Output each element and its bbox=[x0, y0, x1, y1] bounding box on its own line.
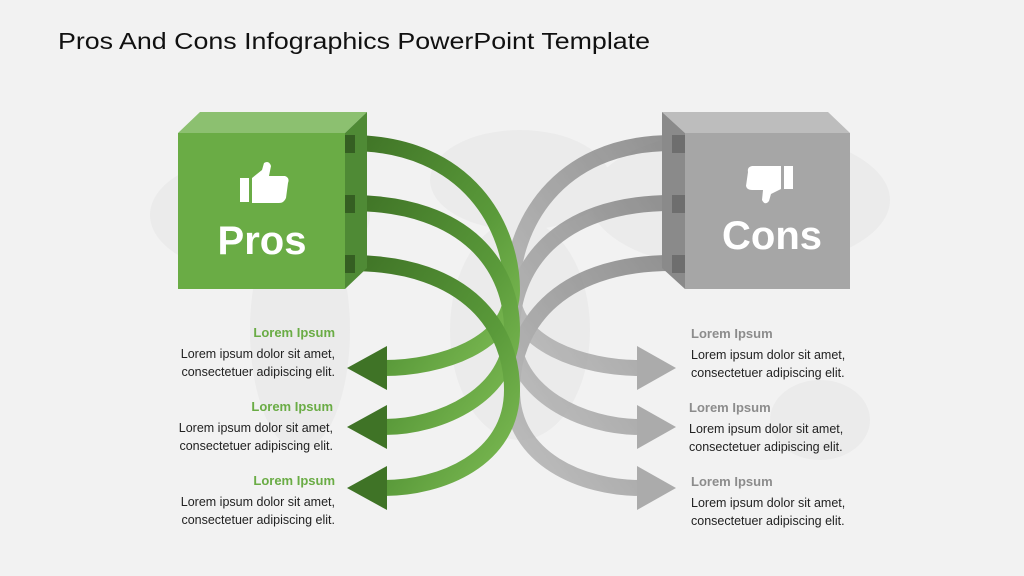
pros texts: consectetuer adipiscing elit. bbox=[179, 439, 333, 453]
title: Pros And Cons Infographics PowerPoint Template bbox=[58, 28, 650, 54]
cons texts: consectetuer adipiscing elit. bbox=[689, 440, 843, 454]
cons texts: Lorem Ipsum bbox=[689, 400, 771, 415]
pros texts: Lorem ipsum dolor sit amet, bbox=[179, 421, 333, 435]
pros texts: Lorem Ipsum bbox=[253, 473, 335, 488]
pros label: Pros bbox=[218, 219, 306, 263]
icon: thumbs down bbox=[746, 166, 793, 203]
icon: thumbs up bbox=[240, 162, 289, 203]
pros texts: Lorem Ipsum bbox=[251, 399, 333, 414]
cons label: Cons bbox=[722, 214, 822, 258]
cons texts: Lorem ipsum dolor sit amet, bbox=[689, 422, 843, 436]
pros texts: Lorem Ipsum bbox=[253, 325, 335, 340]
pros texts: Lorem ipsum dolor sit amet, bbox=[181, 347, 335, 361]
cons texts: Lorem Ipsum bbox=[691, 326, 773, 341]
cons texts bbox=[689, 326, 845, 528]
cons texts: Lorem Ipsum bbox=[691, 474, 773, 489]
cons texts: Lorem ipsum dolor sit amet, bbox=[691, 348, 845, 362]
pros texts bbox=[179, 325, 335, 527]
pros texts: Lorem ipsum dolor sit amet, bbox=[181, 495, 335, 509]
pros texts: consectetuer adipiscing elit. bbox=[181, 513, 335, 527]
cons texts: consectetuer adipiscing elit. bbox=[691, 514, 845, 528]
cons texts: consectetuer adipiscing elit. bbox=[691, 366, 845, 380]
cons texts: Lorem ipsum dolor sit amet, bbox=[691, 496, 845, 510]
pros box bbox=[178, 112, 367, 289]
world map background bbox=[150, 130, 890, 460]
cons arrows bbox=[512, 143, 676, 510]
pros arrows bbox=[347, 143, 512, 510]
cons box bbox=[662, 112, 850, 289]
pros texts: consectetuer adipiscing elit. bbox=[181, 365, 335, 379]
